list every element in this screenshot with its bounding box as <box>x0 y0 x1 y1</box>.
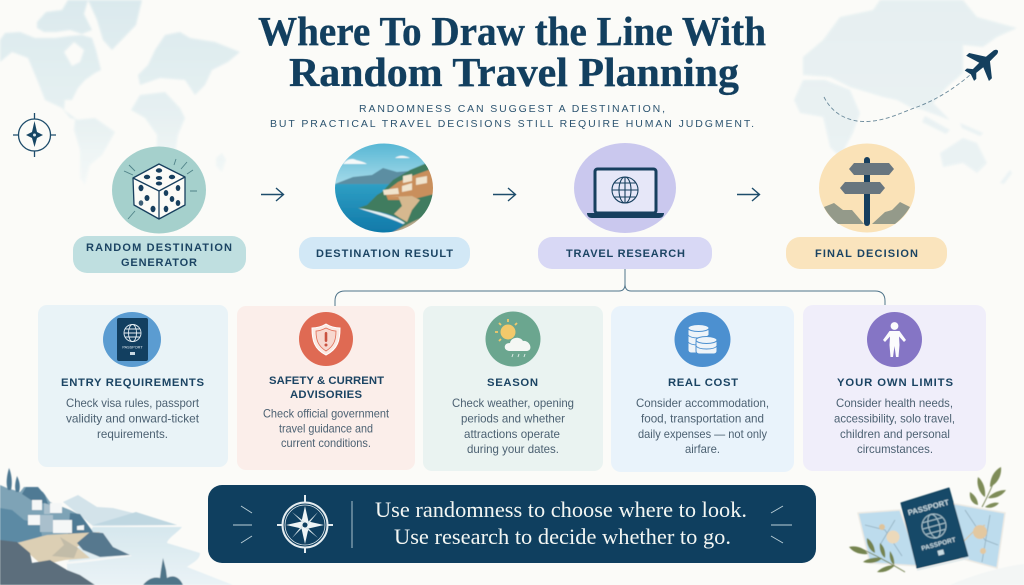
icon: signpost <box>819 144 915 232</box>
left world map <box>0 0 240 185</box>
arrow 2 <box>493 188 516 201</box>
body text <box>263 408 390 450</box>
pill label <box>538 237 712 269</box>
step 1: random destination generator <box>73 146 246 273</box>
body text: Check weather, opening <box>452 397 574 410</box>
panel: safety and current advisories <box>237 306 415 470</box>
connector bracket <box>335 269 885 306</box>
body text: circumstances. <box>857 443 933 456</box>
banner <box>208 485 816 563</box>
icon: passport <box>103 312 161 367</box>
body text: travel guidance and <box>279 422 373 436</box>
heading <box>269 375 384 401</box>
icon: coins <box>674 312 730 367</box>
pill label <box>786 237 947 269</box>
body text: accessibility, solo travel, <box>834 412 955 426</box>
body text: daily expenses — not only <box>638 428 767 441</box>
pill label: RANDOM DESTINATION <box>86 242 232 254</box>
pill label: DESTINATION RESULT <box>316 248 453 260</box>
flight path <box>824 75 970 122</box>
pill label <box>73 236 246 273</box>
icon: small compass <box>13 113 56 157</box>
illustration: passport, map and leaves <box>849 467 1024 585</box>
heading: ENTRY REQUIREMENTS <box>61 377 204 389</box>
body text: current conditions. <box>281 437 371 450</box>
body text: periods and whether <box>461 412 565 426</box>
panel: real cost <box>611 306 794 472</box>
body text: Check official government <box>263 408 390 420</box>
body text: Consider accommodation, <box>636 397 769 410</box>
passport: PASSPORT <box>907 498 950 517</box>
pill label <box>299 237 470 269</box>
body text: validity and onward-ticket <box>66 412 200 426</box>
body text: airfare. <box>685 443 720 456</box>
passport: PASSPORT <box>921 537 957 552</box>
icon: airplane <box>958 38 1009 88</box>
body text: attractions operate <box>464 428 560 441</box>
heading: SAFETY & CURRENT <box>269 375 384 387</box>
takeaway text <box>375 497 747 549</box>
body text <box>636 397 769 456</box>
title: Random Travel Planning <box>289 49 740 95</box>
icon: laptop with globe <box>574 143 676 233</box>
arrow 3 <box>737 188 760 201</box>
body text: during your dates. <box>467 443 559 456</box>
heading: ADVISORIES <box>290 389 362 401</box>
icon: coastal destination <box>334 142 434 234</box>
body text: children and personal <box>840 428 950 441</box>
pill label: FINAL DECISION <box>815 248 918 260</box>
leaves <box>849 467 1006 572</box>
takeaway text: Use randomness to choose where to look. <box>375 497 747 522</box>
body text: food, transportation and <box>641 412 764 426</box>
heading: SEASON <box>487 377 538 389</box>
decorative rays and divider <box>233 501 792 548</box>
heading: YOUR OWN LIMITS <box>837 377 953 389</box>
icon: sun and rain cloud <box>486 312 540 366</box>
right world map <box>794 0 1017 184</box>
passport <box>901 488 969 570</box>
heading: REAL COST <box>668 377 738 389</box>
subtitle: RANDOMNESS CAN SUGGEST A DESTINATION, <box>359 103 665 115</box>
arrow 1 <box>261 188 284 201</box>
title <box>258 8 766 95</box>
panel: your own limits <box>803 305 986 471</box>
body text <box>834 397 955 456</box>
body text <box>452 397 574 456</box>
title: Where To Draw the Line With <box>258 8 766 54</box>
pill label: GENERATOR <box>121 257 197 269</box>
body text: requirements. <box>97 428 168 441</box>
map <box>858 503 1005 568</box>
takeaway text: Use research to decide whether to go. <box>394 524 731 549</box>
body text: Check visa rules, passport <box>66 397 200 410</box>
body text: Consider health needs, <box>836 397 953 410</box>
body text <box>66 397 200 441</box>
step 4: final decision <box>786 144 947 269</box>
icon: passport: PASSPORT <box>122 346 143 350</box>
step 3: travel research <box>538 143 712 269</box>
icon: shield <box>299 312 353 366</box>
pill label: TRAVEL RESEARCH <box>566 248 685 260</box>
subtitle: BUT PRACTICAL TRAVEL DECISIONS STILL REQUIRE HUMAN JUDGMENT. <box>270 118 754 130</box>
illustration: coastal village <box>0 468 233 585</box>
icon: dice <box>112 146 206 234</box>
panel: season <box>423 306 603 471</box>
subtitle <box>270 103 754 130</box>
panel: entry requirements <box>38 305 228 467</box>
icon: compass <box>277 495 333 553</box>
step 2: destination result <box>299 142 470 269</box>
icon: person <box>867 312 922 367</box>
